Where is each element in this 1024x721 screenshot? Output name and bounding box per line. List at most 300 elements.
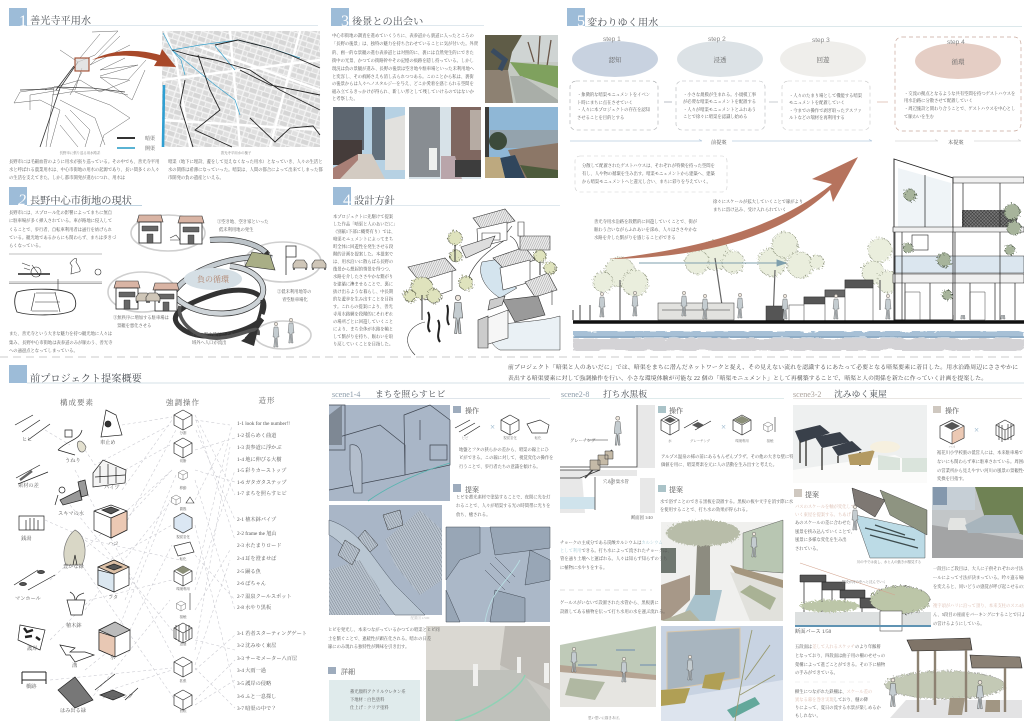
details block: 詳細 bbox=[341, 667, 355, 676]
heading: scene 3-2 bbox=[793, 388, 1022, 399]
trees bbox=[593, 232, 899, 296]
heading: section 1: 善光寺平用水 bbox=[30, 14, 91, 27]
sketch: road with car and cyclist bbox=[9, 254, 102, 315]
labels: 域外へ人口が流出 bbox=[192, 339, 226, 346]
step box 1 bbox=[570, 81, 658, 130]
text: section 3: と変容し、その痕跡さえも消し去られつつある。このことから私は、裏街 bbox=[332, 73, 474, 80]
pavilion, stone wall and gate bbox=[478, 273, 557, 348]
text: scene 1 note: ヒビを発光し、本来つながっているかつての暗渠とヒビ同 bbox=[328, 626, 440, 633]
labels: ③無秩序に増加する駐車場は bbox=[113, 314, 170, 321]
operation captions: 転化 bbox=[180, 556, 187, 561]
drawing: water steps bbox=[852, 485, 927, 564]
ground line bbox=[573, 320, 1024, 324]
illustration: waterside neighbourhood bbox=[404, 209, 560, 355]
heading: section 5 bbox=[567, 8, 1022, 30]
column headings bbox=[60, 395, 276, 407]
image: model photo bbox=[426, 626, 550, 721]
operation captions: 視覚変化 bbox=[176, 534, 190, 539]
diagram: negative cycle bbox=[108, 215, 326, 349]
text: section 3: 「長野の後景」は、独特の魅力を持ち合わせていることに気が付いた。外資 bbox=[332, 40, 479, 47]
operation block: 裾花川小学校裏の低営人には、本来駐車場で bbox=[937, 449, 1023, 456]
operation captions: 分割 bbox=[180, 430, 187, 435]
column headings: 構成要素 bbox=[60, 397, 94, 407]
image: planted blackboard bbox=[661, 626, 783, 721]
heading: scene 2-8 bbox=[561, 388, 784, 399]
text: left notes: ゲールスがいないで設置された水管から、黒板裏に bbox=[560, 599, 659, 606]
proposal block: 風景を挟み込んでいくことで、 bbox=[795, 528, 855, 535]
heading: previous project bbox=[9, 365, 1024, 385]
text: captions and body: 長野市に張り巡る用水路系 bbox=[60, 150, 101, 155]
heading: section 2: 2 bbox=[18, 192, 26, 209]
text: previous project summary: 前プロジェクト「暗渠と人のあいだに」では、暗渠をまちに潜んだネットワークと捉え、その見えない流れを認識するにあたって必要となる暗渠要素に着目した。用水沿路周辺にささやかに bbox=[508, 363, 1018, 371]
form list: 3-1 若者スターティングゲート bbox=[237, 629, 307, 637]
step box 2: ・人々が暗渠モニュメントとふれあう bbox=[683, 106, 756, 113]
operation block: 変換を目指す。 bbox=[937, 475, 967, 482]
heading: section 3: 3 bbox=[341, 13, 349, 30]
element labels: スキマの水 bbox=[58, 509, 85, 517]
arrow: map zoom bbox=[92, 49, 176, 67]
step 1: step 1 bbox=[603, 36, 621, 43]
operation block: 地盤とフタの狭らかの差から、暗渠の線上にひ bbox=[459, 446, 549, 453]
proposal block: 提案 bbox=[805, 490, 819, 499]
text: section 3: の後景からは人々へノスタルジーを与え、どこか愛着を感じられる空間を bbox=[332, 80, 474, 87]
heading: scene 1-4: まちを照らすヒビ bbox=[375, 389, 446, 399]
text: section 4: 暗渠モニュメントによってまち bbox=[333, 236, 393, 242]
text: lower notes bbox=[795, 643, 886, 719]
operation block bbox=[933, 406, 1024, 482]
photo: canal in autumn bbox=[485, 35, 558, 103]
panel: scene 3-2 bbox=[793, 388, 1024, 719]
panel: 2 current state of central Nagano bbox=[9, 187, 326, 354]
operation captions: 置換 bbox=[180, 506, 187, 511]
details block: 蓄光顔料アクリルウレタン系 bbox=[350, 688, 406, 695]
drawing: section: グレーチング bbox=[570, 437, 596, 444]
proposal block bbox=[453, 484, 551, 518]
text: lower notes: の手みができている。 bbox=[795, 669, 838, 676]
operation block: アルプス温泉の様の前にあるもんぜんプラザ。その他の大きな壁に特徴 bbox=[661, 453, 799, 460]
text: current state: 長野市には、スプロール化の影響によってまちに無自 bbox=[9, 209, 112, 216]
column headings: 造形 bbox=[258, 395, 276, 405]
person walking bbox=[453, 295, 463, 334]
step 4: て賑わいを生む bbox=[904, 113, 935, 120]
text: captions and body: 善光寺平用水の様子 bbox=[221, 150, 252, 155]
drawing: pavilion perspective bbox=[885, 638, 1022, 718]
drawing: section perspective: 断面パース 1/50 bbox=[795, 627, 832, 635]
heading: scene 1-4 bbox=[331, 389, 550, 399]
text: section 4: 後景から想起的情景を得つつ、 bbox=[333, 266, 393, 272]
form list: 2-3 水たまりロード bbox=[237, 541, 282, 549]
text: lower notes: となっており、四段面は曲子用の柵のせせっの bbox=[795, 652, 885, 659]
image: blackboard wall with chalk bbox=[560, 626, 656, 707]
form list: 1-7 まちを照らすヒビ bbox=[237, 489, 287, 497]
houses and vacant lot bbox=[114, 215, 326, 347]
operation block: 行うことで、歩行者たちの意識を傾ける。 bbox=[459, 463, 541, 470]
text: section 3: と考察した。 bbox=[332, 95, 358, 102]
photo: canal and fence bbox=[485, 107, 558, 178]
caption: 思い思いに描きあげ。 bbox=[588, 715, 622, 720]
text: section 4: 水路を介したささやかな繋がり bbox=[333, 273, 393, 280]
operation captions: 接触 bbox=[180, 614, 187, 619]
text: captions and body bbox=[9, 150, 323, 181]
operation captions bbox=[176, 430, 190, 713]
text: scene 1 note bbox=[328, 626, 440, 650]
element labels: 護岸 bbox=[27, 644, 37, 652]
text: section 3 bbox=[332, 32, 479, 102]
step box 1: ・象徴的な暗渠モニュメントをイベン bbox=[577, 91, 650, 98]
step box 3: ルトなどの端材を再利用する bbox=[789, 114, 845, 121]
scope lines: 本提案 bbox=[948, 138, 964, 146]
text: section 4 bbox=[333, 213, 397, 348]
heading: scene 3-2: scene3-2 bbox=[793, 390, 821, 399]
operation captions: 透過 bbox=[180, 641, 187, 646]
text: scale note bbox=[713, 198, 803, 213]
text: tourism note bbox=[9, 330, 113, 354]
labels bbox=[113, 218, 311, 346]
text: captions and body: 市開発の負の遺産といえる。 bbox=[168, 174, 224, 181]
labels: ①空き地、空き家といった bbox=[217, 218, 269, 225]
connecting dashed lines bbox=[45, 415, 235, 708]
details block: 仕上げ：クリア塗料 bbox=[350, 704, 389, 711]
text: section 3: 組み立てるきっかけが得られ、新しい形として残していけるのではないか bbox=[332, 88, 474, 95]
operation block: 接触 bbox=[767, 438, 774, 443]
element icons bbox=[14, 410, 138, 708]
legend bbox=[117, 135, 155, 152]
callout: guesthouse note: から暗渠モニュメントへと還元し合い、まちに彩りを与えていく。 bbox=[582, 178, 711, 185]
form list: 3-3 サーモメーター八百屋 bbox=[237, 654, 297, 662]
operation block: 操作 bbox=[945, 406, 959, 415]
proposal block: 風景に多様な変化を生み出 bbox=[795, 536, 847, 543]
element labels: 橋跡 bbox=[26, 682, 37, 690]
operation block: 転化 bbox=[535, 435, 542, 440]
label: negative cycle: 負の循環 bbox=[197, 274, 229, 284]
dashed divider upper bbox=[0, 356, 1024, 358]
text: section 4: を建築に滲ませることで、裏に bbox=[333, 280, 393, 288]
operation block: 環境利用 bbox=[735, 438, 749, 443]
people bbox=[599, 291, 1006, 319]
operation block bbox=[453, 406, 553, 470]
labels: 景観を悪化させる bbox=[117, 322, 151, 329]
form list: 3-6 ふと一息探し bbox=[237, 692, 276, 700]
text: captions and body: 暗渠（地下に埋設、蓋をして見えなくなった用水）となっていき、人々の生活と bbox=[168, 158, 323, 165]
step 4: 循環 bbox=[952, 57, 965, 66]
tree trunks bbox=[422, 245, 540, 320]
drawing: section perspective: 階段が河の中へと沈んでいく bbox=[842, 579, 886, 584]
form list: 2-1 植木鉢パイプ bbox=[237, 515, 277, 523]
operation captions: 切断 bbox=[180, 458, 187, 463]
text: section 4: 本プロジェクトに先駆けて提案 bbox=[333, 213, 394, 220]
drawing: section perspective bbox=[795, 563, 931, 635]
text: section 4: 的な遊歩を生み出すことを目指 bbox=[333, 296, 394, 302]
image: street perspective bbox=[329, 405, 450, 501]
heading: scene 2-8: 打ち水黒板 bbox=[603, 388, 647, 399]
step box 1: ト時にまちに点在させていく bbox=[577, 99, 633, 106]
proposal block: あのスケールの差に合わせた bbox=[795, 519, 851, 526]
operation block: 操作 bbox=[465, 406, 479, 415]
step 4: 用水沿路に分散させて配置していく bbox=[904, 97, 973, 104]
text: lower notes: 柳生につながれた鉄柵は、スケール差の bbox=[795, 688, 872, 695]
step 4: ・周辺施設と関わり合うことで、ゲストハウスを中心とし bbox=[904, 105, 1015, 112]
step 3: 回遊 bbox=[816, 55, 830, 64]
map: irrigation network sketch bbox=[14, 31, 146, 147]
step box 3 bbox=[782, 81, 870, 130]
step box 1: ・人々に本プロジェクトの存在を認知 bbox=[577, 106, 651, 113]
element labels: 車止め bbox=[100, 438, 116, 446]
text: previous project summary bbox=[508, 363, 1018, 382]
panel: previous project summary bbox=[9, 363, 1024, 714]
section view: street and trees bbox=[573, 157, 1024, 351]
operation block: × bbox=[721, 422, 726, 432]
text: left notes: 管を通り土壌へと運ばれる。人々は知らず知らずのうち bbox=[560, 555, 667, 562]
panel: 3 encounter with the background bbox=[331, 8, 558, 179]
panel: 4 design policy bbox=[333, 187, 560, 355]
caption: 配置図 1/500 bbox=[411, 615, 430, 620]
operation block: 水 bbox=[668, 438, 672, 443]
proposal block: 提案 bbox=[669, 485, 683, 494]
heading: section 2: 長野中心市街地の現状 bbox=[30, 194, 132, 207]
centre house bbox=[493, 222, 550, 290]
text: section 3: 現況は負の景観が進み、長野の後景は空き地や駐車場といった未利用地へ bbox=[332, 65, 475, 72]
text: section 3: 街中の光景、かつての街路幹やその記憶の痕跡を隠し持っている。しかし bbox=[332, 57, 474, 64]
form list bbox=[237, 420, 307, 712]
proposal block: れることで、人々が暗渠する光の時間帯に光りを bbox=[456, 502, 550, 509]
text: tourism note: 集み、長野中心市街地は表参道のみが賑わう、善光寺 bbox=[9, 339, 113, 346]
photo: narrow alley bbox=[409, 107, 481, 179]
operation block: × bbox=[974, 425, 979, 435]
bubbles bbox=[108, 215, 321, 349]
text: section 4: により、まち全体が水路を軸と bbox=[333, 326, 393, 332]
text: left notes: として利用できる。打ち水によって流されたチョークは、 bbox=[560, 547, 672, 554]
form list: 1-5 彩りカーストップ bbox=[237, 466, 287, 474]
element labels: マンホール bbox=[15, 595, 42, 602]
proposal block bbox=[658, 485, 794, 513]
step box 1: させることを目的とする bbox=[577, 114, 624, 121]
guest house bbox=[893, 159, 1024, 320]
element labels: 豊かな緑 bbox=[63, 562, 85, 570]
text: section 4: す。これらの提案により、善光 bbox=[333, 303, 394, 310]
callout: guesthouse note bbox=[575, 156, 727, 192]
text: scale note: 徐々にスケールが拡大していくことで線がより bbox=[713, 198, 803, 205]
details block bbox=[328, 667, 420, 721]
step 4 bbox=[895, 37, 1021, 131]
operation block: 操作 bbox=[669, 406, 683, 415]
step box 3: ・人々のたまり場として機能する暗渠 bbox=[789, 92, 863, 99]
scope lines bbox=[570, 138, 1021, 146]
operation captions: 回転 bbox=[180, 708, 187, 713]
step 1: 認知 bbox=[608, 55, 622, 64]
text: captions and body: 水の関係は希薄になっていった。暗渠は、人間の都合によって出来てしまった都 bbox=[168, 166, 323, 173]
text: route note bbox=[594, 218, 698, 241]
black stepping marks bbox=[428, 305, 449, 342]
text: scene 1 note: 士を繋ぐことで、連続性が顕在化される。暗れの日差 bbox=[328, 635, 432, 642]
step 3: step 3 bbox=[812, 37, 830, 44]
water band bbox=[573, 331, 1024, 351]
heading: section 3: 後景との出会い bbox=[352, 15, 423, 28]
text: route note: 賑わう合いながらふれあいを深め、人々はささやかな bbox=[594, 226, 697, 233]
callout: guesthouse note: 分散して配置されたゲストハウスは、それぞれが特徴を持った空間を bbox=[582, 162, 715, 169]
text: tourism note: への通過点となってしまっている。 bbox=[9, 347, 78, 354]
text: current state: に駐車場が多く挿入されている。車が路地に侵入して bbox=[9, 217, 112, 224]
legend: 開渠 bbox=[145, 145, 155, 152]
labels: 青空駐車場化 bbox=[282, 296, 308, 303]
step 4: ・交流の拠点となるような共有空間を持つゲストハウスを bbox=[904, 90, 1015, 97]
element labels bbox=[15, 436, 134, 714]
heading: section 4 bbox=[333, 187, 560, 209]
text: left notes bbox=[560, 539, 672, 615]
text: left notes: に植物に水やりをする。 bbox=[560, 564, 607, 571]
text: scene 1 note: 線にのみ現れる独特性が興味を引き出す。 bbox=[328, 643, 409, 650]
text: lower notes: りによって、夏日の流する水景が楽しめるか bbox=[795, 704, 881, 711]
step box 2: ことで徐々に暗渠を認識し始める bbox=[683, 113, 747, 120]
arrow: growth bbox=[609, 157, 858, 259]
text: current state: らくなっている。 bbox=[9, 242, 43, 249]
text: route note: 水路を介した繋がりを感じることができる bbox=[594, 234, 676, 241]
labels: ④街の魅力低下により bbox=[191, 331, 234, 338]
text: captions and body: の生活を支えてきた。しかし都市開発が進むにつれ、用水は bbox=[9, 174, 126, 181]
heading: section 4: 設計方針 bbox=[354, 194, 395, 207]
heading: section 1: 1 bbox=[19, 13, 27, 30]
element labels: フタ bbox=[108, 593, 118, 601]
element labels: はみ出る緑 bbox=[60, 706, 87, 714]
operation block: 価値を用に、暗渠要素を元に人の活動を生み出すと考えた。 bbox=[661, 461, 777, 468]
text: section 4: （別紙1下部に概要有り）では、 bbox=[333, 228, 395, 235]
element labels: 溝 bbox=[72, 661, 78, 669]
form list: 2-4 耳を澄ませば bbox=[237, 554, 277, 562]
text: scale note: まちに溶け込み、受け入れられていく bbox=[713, 206, 786, 213]
spiral arrow bbox=[173, 240, 272, 346]
text: lower notes: もしれない。 bbox=[795, 712, 821, 719]
heading: scene 2-8: scene2-8 bbox=[561, 390, 589, 399]
text: lower notes: 異なる幕を巻き実現しており、樋の降 bbox=[795, 696, 869, 703]
image: green wall courtyard bbox=[661, 520, 783, 621]
form list: 1-1 look for the number!! bbox=[237, 420, 290, 427]
text: section 4: り戻していくことを目指した。 bbox=[333, 340, 393, 348]
text: left notes: 設置してある植物を伝って打ち水用の水を運ぶ流れる。 bbox=[560, 608, 667, 615]
column headings: 強調操作 bbox=[166, 397, 200, 407]
element labels: 水 bbox=[110, 653, 116, 661]
operation captions: 拡張 bbox=[180, 678, 187, 683]
step box 2 bbox=[676, 81, 765, 130]
form list: 2-2 frame the 旭山 bbox=[237, 529, 277, 537]
text: right notes: の営けるようにしている。 bbox=[933, 620, 985, 627]
text: lower notes: 架構によって進ごことができる。その下に植物 bbox=[795, 661, 886, 668]
benches and pavilion steps bbox=[573, 280, 873, 321]
heading: scene 1-4: scene1-4 bbox=[332, 390, 360, 399]
element labels: ハコ bbox=[108, 541, 118, 547]
operation block: ハコ bbox=[949, 445, 955, 449]
trees bbox=[404, 231, 556, 303]
proposal block: されている。 bbox=[795, 546, 821, 552]
form list: 3-7 暗渠の中で？ bbox=[237, 704, 276, 712]
form list: 2-7 温泉クールスポット bbox=[237, 592, 292, 600]
text: section 4: 階的計画を提案した。本提案で bbox=[333, 250, 393, 258]
operation block: × bbox=[490, 422, 495, 432]
form list: 2-8 水やり黒板 bbox=[237, 603, 272, 611]
heading: scene 3-2: 沈みゆく東屋 bbox=[834, 388, 887, 399]
panel: 5 changing irrigation water bbox=[567, 8, 1024, 351]
drawing: section bbox=[560, 405, 655, 521]
text: captions and body: 長野市には毛細血管のように用水が張り巡っている。その中でも、善光寺平用 bbox=[9, 158, 159, 165]
proposal block: を使用することで、打ち水の効果が得られる。 bbox=[660, 506, 750, 513]
text: current state bbox=[9, 209, 117, 249]
heading: section 3 bbox=[331, 8, 484, 30]
operation block bbox=[658, 406, 799, 468]
text: tourism note: また、善光寺という大きな魅力を持つ観光地に人々は bbox=[9, 330, 113, 337]
left house bbox=[408, 236, 495, 300]
proposal block: バスのスケールを軸が変化して bbox=[795, 503, 855, 510]
text: current state: ている。観光地であるからにも関わらず、まちは歩きづ bbox=[9, 234, 117, 241]
text: section 3: 的、画一的な景観の進む表参道とは対照的に、裏には自然発生的にできた bbox=[332, 49, 474, 56]
text: section 4: して繋がりを持ち、賑わいを取 bbox=[333, 333, 394, 340]
panel: scene 1-4 bbox=[328, 389, 553, 721]
callout: guesthouse note: 有し、人や物の循環を生み出す。暗渠モニュメントから建築へ、建築 bbox=[582, 170, 716, 177]
text: current state: くることで、歩行者、自転車利用者は通行を妨げられ bbox=[9, 226, 113, 233]
step box 3: モニュメントを配置していく bbox=[789, 99, 845, 106]
step 2: step 2 bbox=[708, 36, 726, 43]
text: left notes: チョークの主成分である炭酸カルシウムはカルシウム bbox=[560, 539, 663, 546]
step 3 bbox=[780, 37, 866, 77]
form list: 3-5 護岸の侵略 bbox=[237, 679, 272, 687]
scope lines: 前提案 bbox=[711, 138, 727, 146]
proposal block bbox=[794, 489, 855, 552]
path and canal bbox=[408, 226, 560, 355]
drawing: section: 断面図 1/40 bbox=[631, 514, 653, 521]
photo: parked cars bbox=[932, 487, 1023, 558]
text: right notes bbox=[933, 565, 1024, 627]
form list: 2-6 ぼちゃん bbox=[237, 579, 266, 587]
heading: previous project: 前プロジェクト提案概要 bbox=[30, 372, 142, 385]
step box 3: ・今までの操作で剥ぎ取ったアスファ bbox=[789, 107, 862, 114]
heading: section 4: 4 bbox=[343, 192, 351, 209]
heading: section 2 bbox=[9, 187, 142, 209]
operation captions: 環境利用 bbox=[176, 586, 190, 591]
element labels: ヒビ bbox=[22, 436, 32, 443]
heading: section 5: 変わりゆく用水 bbox=[587, 16, 658, 29]
label: negative cycle bbox=[184, 268, 242, 290]
text: right notes: ん、5段目の座面をバーキングにすることで日よ bbox=[933, 611, 1024, 618]
image: aerial view bbox=[329, 505, 442, 615]
operation block: ヒビ bbox=[462, 435, 469, 440]
operation icons bbox=[172, 410, 194, 710]
text: section 4: 寺用水路網を段階的にそれぞれ bbox=[333, 310, 394, 318]
proposal block: 水で浴ずことのできる黒板を設置する。黒板の板や文字を消す際に水 bbox=[660, 498, 794, 505]
legend: 暗渠 bbox=[145, 135, 155, 142]
form list: 1-2 揺らめく曲道 bbox=[237, 431, 276, 439]
details block: 下地材：白色塗料 bbox=[350, 696, 385, 703]
step box 2: ・小さな規模が生まれる。小規模工事 bbox=[683, 91, 757, 98]
text: previous project summary: 表出する暗渠要素に対して強調操作を行い、小さな環境体験が可能な 22 個の「暗渠モニュメント」として再構築することで、暗渠と人の関係を新たに作っていく計画を提案した。 bbox=[508, 374, 987, 382]
diagram: elements, operations, forms bbox=[14, 395, 307, 714]
form list: 3-2 沈みゆく東屋 bbox=[237, 641, 276, 649]
text: route note: 善光寺用水沿路を段階的に回遊していくことで、街が bbox=[594, 218, 698, 225]
operation block: グレーチング bbox=[690, 438, 711, 443]
form list: 3-4 大雨一過 bbox=[237, 666, 266, 674]
text: lower notes: 五段面は差して入れるスケッチのより年齢層 bbox=[795, 643, 881, 650]
form list: 1-4 地に伸びる大樹 bbox=[237, 455, 282, 463]
text: section 3: 中心市街地の調査を進めていくうちに、表参道から裏道に入ったところの bbox=[332, 32, 474, 39]
drawing: section: 穴あき集水管 bbox=[603, 478, 629, 485]
step 2 bbox=[677, 36, 763, 77]
heading: section 5: 5 bbox=[577, 13, 585, 30]
panel: 1 irrigation water bbox=[9, 8, 323, 181]
step 4: step 4 bbox=[947, 39, 965, 46]
text: section 4: の場所ごとに回遊していくこと bbox=[333, 318, 393, 325]
photo: street bbox=[333, 107, 405, 179]
drawing: water steps: 川の中では流し、水と人の動きが顔見する bbox=[857, 559, 921, 564]
map: central city canals bbox=[162, 31, 320, 147]
text: section 4: 町全体に回遊性を発生させる段 bbox=[333, 243, 394, 250]
text: captions and body: 水と呼ばれる農業用水は、中心市街地の用水の起源であり、長い間多くの人々 bbox=[9, 166, 159, 173]
marker: enlarged area bbox=[75, 58, 89, 71]
